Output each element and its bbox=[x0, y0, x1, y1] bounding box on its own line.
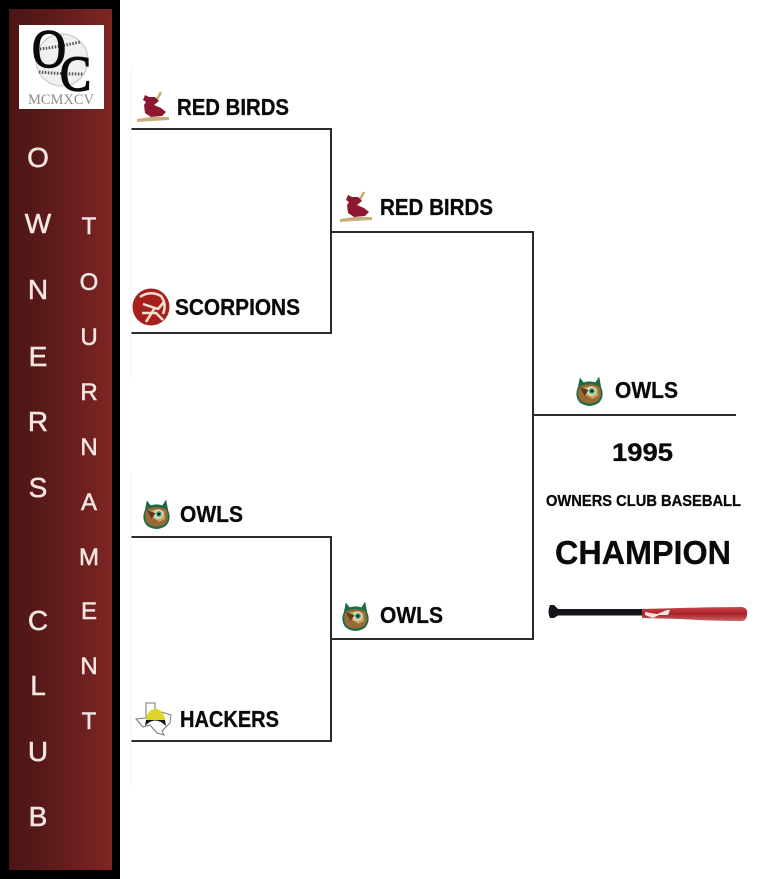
vertical title: tournament: U bbox=[80, 324, 98, 351]
vertical title: owners club: N bbox=[28, 274, 48, 305]
semifinal entry: owls: OWLS bbox=[180, 501, 243, 527]
vertical title: tournament bbox=[79, 213, 99, 735]
vertical title: tournament: T bbox=[82, 213, 97, 240]
final entry: owls bbox=[342, 602, 443, 631]
vertical title: tournament: E bbox=[81, 598, 97, 625]
vertical title: owners club: R bbox=[28, 406, 48, 437]
vertical title: tournament: N bbox=[80, 653, 98, 680]
champion caption: OWNERS CLUB BASEBALL bbox=[546, 493, 741, 510]
vertical title: owners club: S bbox=[29, 472, 47, 503]
vertical title: tournament: A bbox=[81, 489, 97, 516]
final entry: owls: OWLS bbox=[380, 602, 443, 628]
icon: red birds logo bbox=[137, 92, 169, 122]
semifinal entry: red birds bbox=[137, 92, 289, 122]
club logo: O bbox=[32, 19, 66, 79]
club logo: C bbox=[60, 45, 91, 101]
vertical title: owners club: L bbox=[30, 670, 46, 701]
vertical title: owners club: O bbox=[27, 142, 49, 173]
semifinal entry: red birds: RED BIRDS bbox=[177, 94, 289, 120]
icon: baseball bat bbox=[548, 605, 747, 621]
icon: red birds logo bbox=[340, 192, 372, 222]
vertical title: owners club bbox=[25, 142, 52, 832]
club logo bbox=[19, 19, 104, 109]
semifinal entry: hackers: HACKERS bbox=[180, 706, 279, 732]
tournament bracket lines bbox=[131, 68, 736, 785]
champion entry: owls bbox=[576, 377, 678, 406]
champion caption: CHAMPION bbox=[555, 534, 731, 571]
vertical title: owners club: C bbox=[28, 605, 48, 636]
icon: owl logo bbox=[576, 377, 603, 406]
icon: owl logo bbox=[342, 602, 369, 631]
semifinal entry: hackers bbox=[136, 703, 279, 735]
champion caption: 1995 bbox=[612, 439, 673, 467]
icon: owl logo bbox=[143, 500, 170, 529]
vertical title: owners club: E bbox=[29, 341, 47, 372]
final entry: red birds: RED BIRDS bbox=[380, 194, 493, 220]
champion caption bbox=[546, 439, 741, 571]
vertical title: tournament: M bbox=[79, 544, 99, 571]
club logo: MCMXCV bbox=[28, 92, 94, 108]
semifinal entry: scorpions: SCORPIONS bbox=[175, 294, 300, 320]
vertical title: owners club: U bbox=[28, 736, 48, 767]
vertical title: tournament: R bbox=[80, 379, 98, 406]
vertical title: owners club: B bbox=[29, 801, 47, 832]
icon: hackers texas logo bbox=[136, 703, 171, 735]
semifinal entry: scorpions bbox=[132, 288, 300, 326]
sidebar panel bbox=[0, 0, 120, 879]
vertical title: tournament: T bbox=[82, 708, 97, 735]
vertical title: owners club: W bbox=[25, 208, 52, 239]
semifinal entry: owls bbox=[143, 500, 243, 529]
champion entry: owls: OWLS bbox=[615, 377, 678, 403]
vertical title: tournament: N bbox=[80, 434, 98, 461]
vertical title: tournament: O bbox=[80, 269, 98, 296]
icon: scorpion logo bbox=[132, 288, 170, 326]
final entry: red birds bbox=[340, 192, 493, 222]
